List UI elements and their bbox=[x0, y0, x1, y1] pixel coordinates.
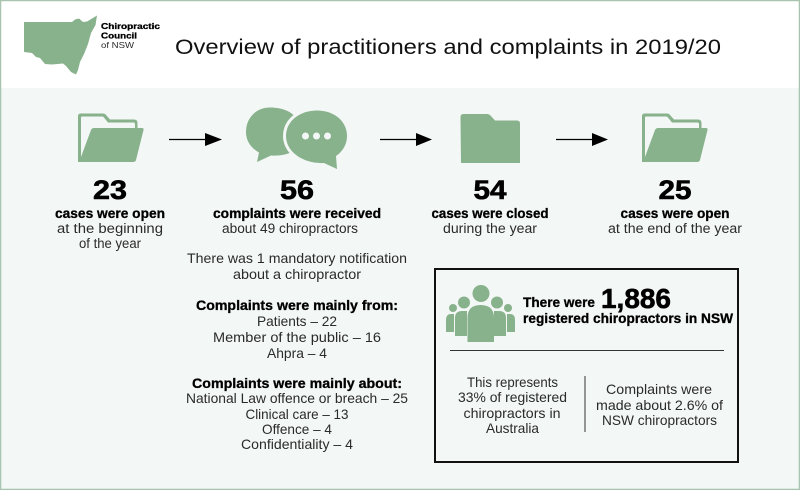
heading: 1,886 registered: registered chiropractors in NSW bbox=[523, 310, 734, 326]
text: 33% of registered chiropractors: chiropractors in bbox=[464, 405, 560, 421]
icon: NSW map bbox=[24, 16, 97, 74]
arrow: complaints to closed bbox=[380, 133, 432, 146]
list: complaints mainly from: Ahpra – 4 bbox=[267, 345, 327, 361]
logo text: Council bbox=[101, 30, 137, 40]
stat: 23 cases open at beginning bbox=[55, 175, 165, 251]
logo: Chiropractic Council of NSW bbox=[24, 16, 160, 74]
icon: closed folder bbox=[460, 114, 520, 163]
icon: open folder, end of year bbox=[642, 114, 708, 162]
stat: 56 complaints received: about 49 chiropractors bbox=[222, 221, 358, 236]
arrow: closed to open bbox=[556, 133, 608, 146]
stat: 25 cases open at end: cases were open bbox=[620, 206, 730, 221]
text: complaints about 2.6% bbox=[596, 381, 723, 428]
text: complaints about 2.6%: made about 2.6% of bbox=[596, 397, 723, 413]
stat: 56 complaints received: 56 bbox=[280, 175, 314, 205]
logo text bbox=[101, 21, 160, 50]
heading: 1,886 registered: There were bbox=[523, 294, 595, 310]
stat: 23 cases open at beginning: cases were open bbox=[55, 206, 165, 221]
text: mandatory notification: There was 1 mandatory notification bbox=[187, 250, 407, 266]
list: complaints mainly about: Clinical care – 13 bbox=[246, 406, 349, 422]
stat: 23 cases open at beginning: at the beginning bbox=[57, 221, 163, 236]
icon: group of people bbox=[446, 285, 515, 342]
heading: 1,886 registered bbox=[523, 283, 734, 326]
text: 33% of registered chiropractors: Australia bbox=[486, 420, 539, 436]
list: complaints mainly about: Offence – 4 bbox=[262, 421, 332, 437]
stat: 54 cases closed: 54 bbox=[474, 175, 506, 205]
list: complaints mainly about: Confidentiality – 4 bbox=[241, 436, 353, 452]
stat: 25 cases open at end: 25 bbox=[658, 175, 692, 205]
stat: 54 cases closed: during the year bbox=[443, 221, 538, 236]
logo text: Chiropractic bbox=[101, 21, 160, 31]
panel: registered chiropractors bbox=[435, 269, 738, 462]
text: mandatory notification: about a chiropractor bbox=[233, 266, 361, 282]
text: 33% of registered chiropractors: This represents bbox=[467, 374, 558, 390]
text: mandatory notification bbox=[187, 250, 407, 282]
heading: 1,886 registered: 1,886 bbox=[601, 283, 671, 314]
icon: speech bubbles bbox=[246, 108, 347, 169]
list: complaints mainly about: National Law offence or breach – 25 bbox=[186, 390, 408, 406]
stat: 56 complaints received bbox=[213, 175, 381, 236]
text: complaints about 2.6%: NSW chiropractors bbox=[602, 412, 717, 428]
list: complaints mainly from: Member of the public – 16 bbox=[213, 329, 381, 345]
arrow: open to complaints bbox=[169, 133, 222, 146]
icon: open folder, start of year bbox=[78, 114, 144, 162]
title: Overview of practitioners and complaints in 2019/20 bbox=[175, 35, 721, 59]
text: complaints about 2.6%: Complaints were bbox=[606, 381, 712, 397]
stat: 23 cases open at beginning: 23 bbox=[93, 175, 127, 205]
text: 33% of registered chiropractors bbox=[458, 374, 567, 436]
stat: 54 cases closed bbox=[432, 175, 548, 236]
stat: 25 cases open at end: at the end of the year bbox=[608, 221, 743, 236]
list: complaints mainly from: Patients – 22 bbox=[257, 313, 337, 329]
list: complaints mainly about bbox=[186, 375, 408, 452]
stat: 25 cases open at end bbox=[608, 175, 743, 236]
stat: 54 cases closed: cases were closed bbox=[432, 206, 548, 221]
stat: 23 cases open at beginning: of the year bbox=[79, 236, 141, 251]
text: 33% of registered chiropractors: 33% of registered bbox=[458, 389, 567, 405]
list: complaints mainly about: Complaints were mainly about: bbox=[192, 375, 402, 391]
stat: 56 complaints received: complaints were received bbox=[213, 206, 381, 221]
list: complaints mainly from: Complaints were mainly from: bbox=[196, 297, 398, 313]
logo text: of NSW bbox=[101, 40, 134, 50]
list: complaints mainly from bbox=[196, 297, 398, 361]
